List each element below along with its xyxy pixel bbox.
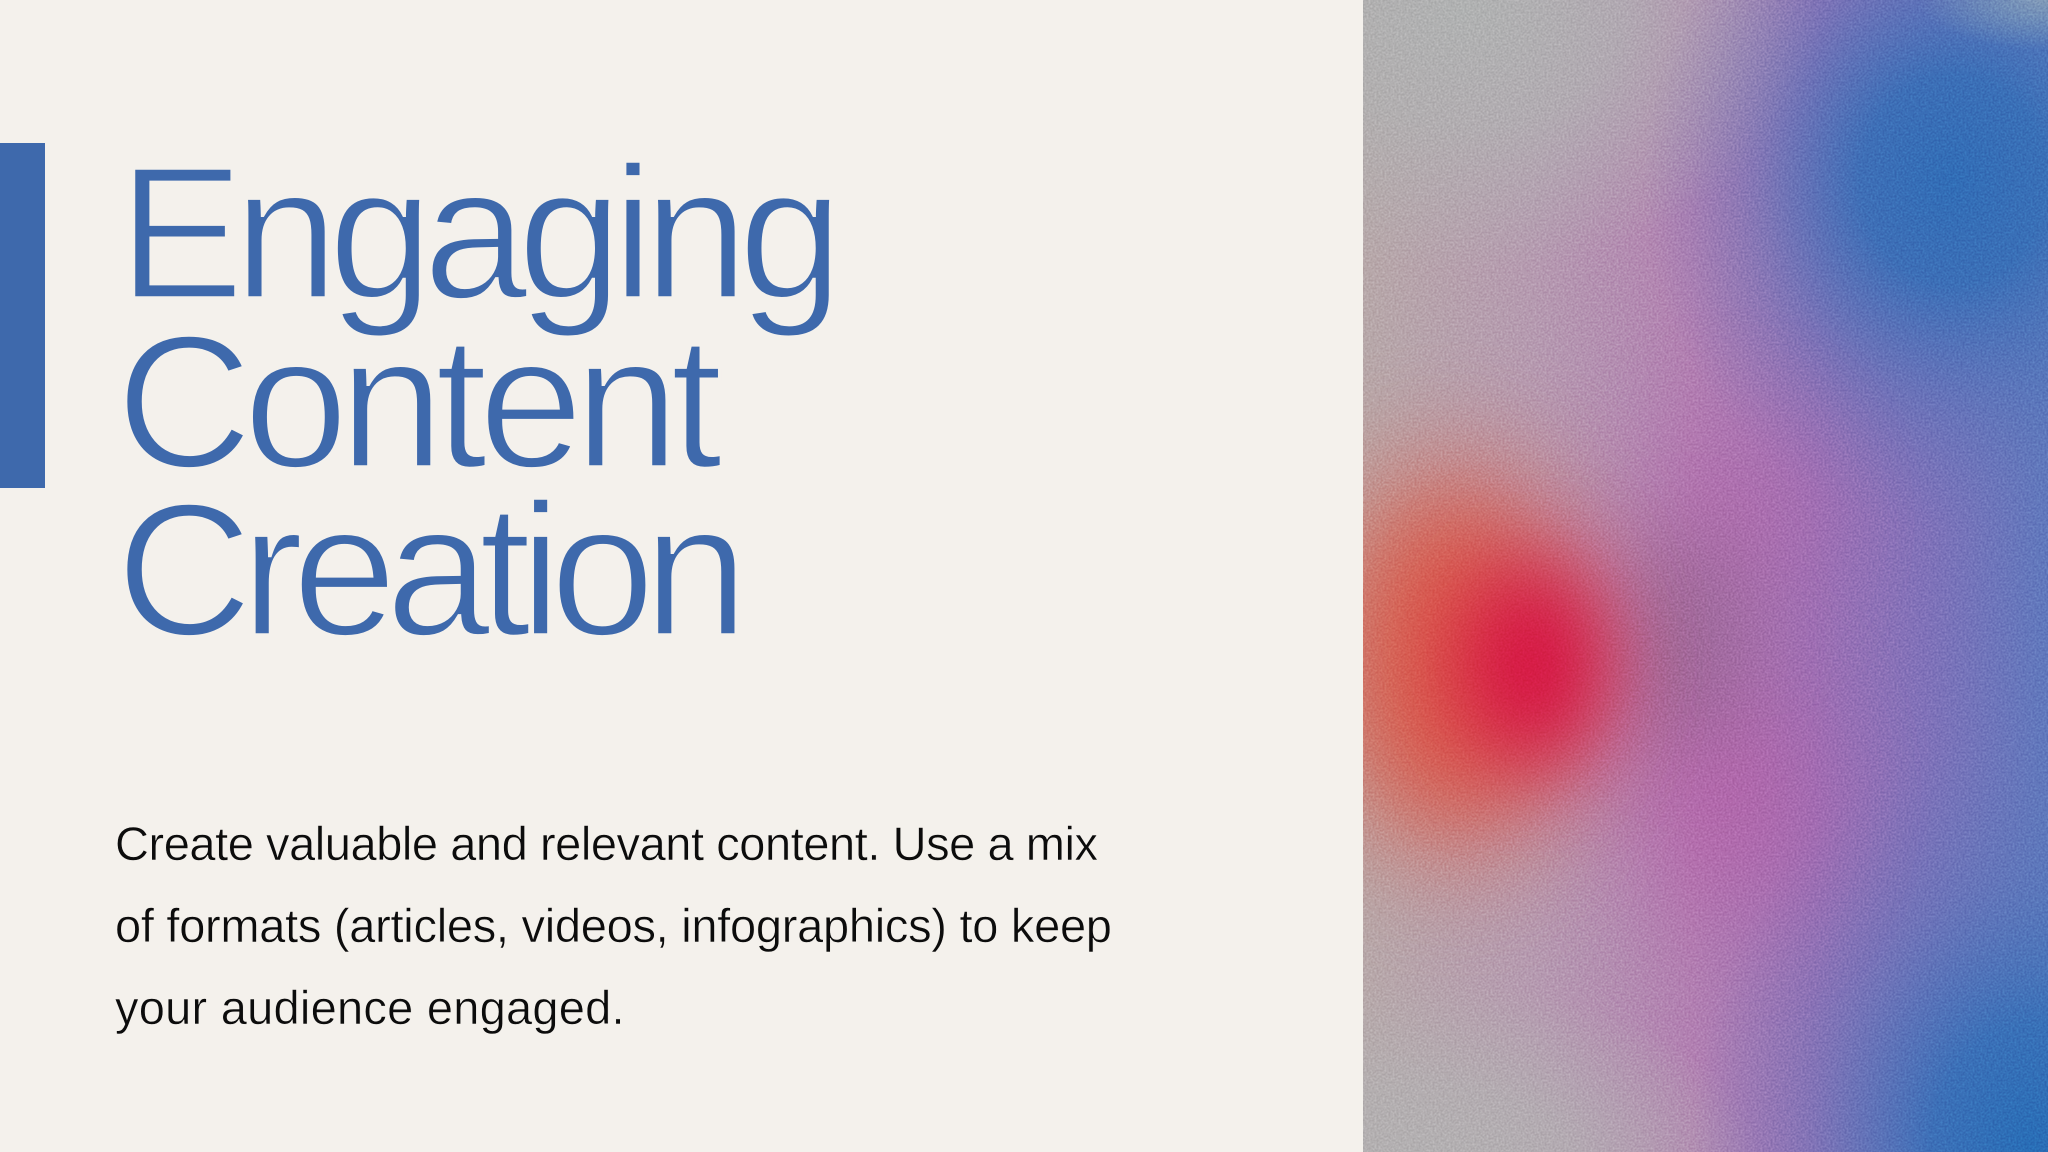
body text: Create valuable and relevant content. Use a mix — [115, 817, 1098, 870]
title: Engaging — [118, 128, 833, 339]
title — [116, 128, 833, 676]
title: Content — [116, 297, 714, 508]
panel: grainy colour gradient — [1363, 0, 2048, 1152]
accent bar — [0, 143, 45, 488]
title: Creation — [116, 465, 737, 676]
body text: of formats (articles, videos, infographics) to keep — [115, 899, 1112, 952]
body text: your audience engaged. — [115, 981, 625, 1034]
body text — [115, 817, 1112, 1034]
